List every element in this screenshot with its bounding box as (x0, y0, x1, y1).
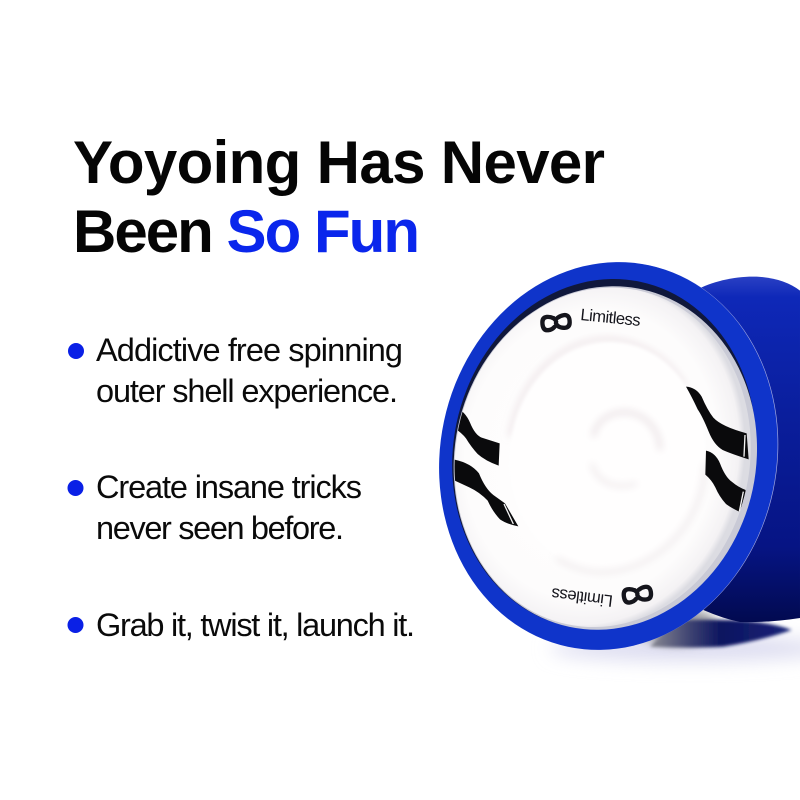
dark gap (420, 251, 788, 657)
floor shadow (550, 608, 800, 661)
stripe highlights (504, 435, 745, 524)
bottom logo icon (623, 586, 652, 603)
title: Yoyoing Has Never (73, 129, 605, 196)
black wave stripes (453, 387, 749, 526)
outer rim (403, 230, 800, 682)
silver edge (422, 258, 789, 658)
bullet: free spinning shell: outer shell experience. (96, 373, 398, 409)
bullet: free spinning shell (68, 332, 403, 409)
bullet: insane tricks (68, 469, 362, 546)
top logo text: Limitless (580, 305, 642, 330)
bullet: free spinning shell: Addictive free spinning (96, 332, 403, 368)
bottom logo text: Limitless (550, 584, 614, 611)
top logo icon (542, 315, 570, 331)
rim light edge (405, 231, 800, 681)
title: Been So Fun (73, 198, 420, 265)
title (73, 129, 605, 265)
bullet: insane tricks: Create insane tricks (96, 469, 362, 505)
yoyo product illustration (439, 262, 800, 668)
raised hill (498, 333, 716, 581)
yoyo body (695, 277, 800, 622)
bullet: insane tricks: never seen before. (96, 510, 344, 546)
centre hub (592, 412, 660, 486)
bullet: grab it: Grab it, twist it, launch it. (96, 607, 415, 643)
white face (423, 260, 782, 655)
